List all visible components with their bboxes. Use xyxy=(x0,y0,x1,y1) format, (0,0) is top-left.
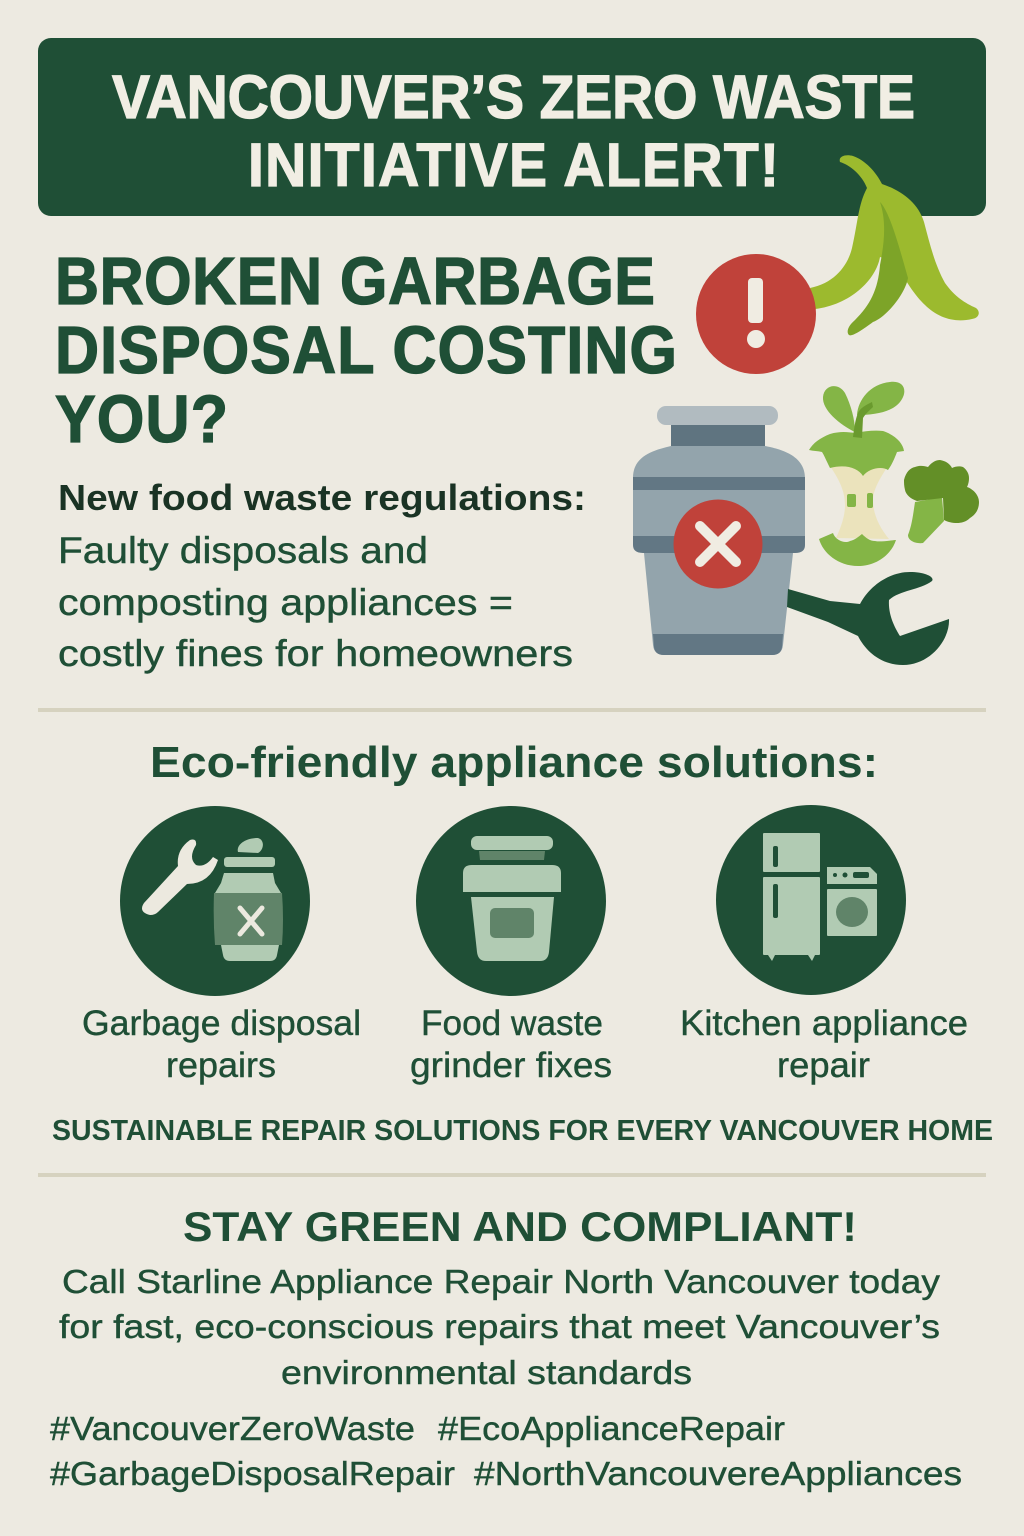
icon: red x badge xyxy=(674,500,762,588)
heading: broken garbage disposal: YOU? xyxy=(55,382,228,457)
heading: broken garbage disposal: DISPOSAL COSTING xyxy=(55,313,677,388)
text block: regulations detail: composting appliances = xyxy=(58,582,513,623)
title: INITIATIVE ALERT! xyxy=(248,130,779,199)
title xyxy=(112,62,915,199)
label: kitchen appliance repair: Kitchen appliance xyxy=(680,1004,968,1043)
tagline: SUSTAINABLE REPAIR SOLUTIONS FOR EVERY VANCOUVER HOME xyxy=(52,1115,993,1147)
label: garbage disposal repairs xyxy=(82,1004,361,1085)
heading: broken garbage disposal: BROKEN GARBAGE xyxy=(55,244,655,319)
icon: garbage disposal repairs xyxy=(120,806,310,996)
text block: regulations detail: costly fines for homeowners xyxy=(58,633,573,674)
text block: call to action xyxy=(59,1263,941,1391)
label: food waste grinder fixes xyxy=(410,1004,612,1085)
text block: regulations lead: New food waste regulations: xyxy=(58,477,586,518)
heading: stay green and compliant: STAY GREEN AND COMPLIANT! xyxy=(183,1203,857,1250)
text block: hashtags: #NorthVancouvereAppliances xyxy=(474,1455,962,1492)
icon: broccoli xyxy=(904,460,979,543)
label: garbage disposal repairs: Garbage disposal xyxy=(82,1004,361,1043)
panel: problem section xyxy=(55,244,677,674)
panel: call to action xyxy=(50,1203,962,1492)
icon: food waste grinder xyxy=(416,806,606,996)
text block: call to action: Call Starline Appliance Repair North Vancouver today xyxy=(62,1263,941,1300)
text block: regulations detail xyxy=(58,530,573,674)
icon: kitchen appliances xyxy=(716,805,906,995)
text block: call to action: for fast, eco-conscious repairs that meet Vancouver’s xyxy=(59,1308,940,1345)
text block: call to action: environmental standards xyxy=(281,1354,692,1391)
text block: regulations detail: Faulty disposals and xyxy=(58,530,428,571)
label: garbage disposal repairs: repairs xyxy=(166,1046,276,1085)
text block: hashtags: #EcoApplianceRepair xyxy=(438,1410,785,1447)
icon: broken garbage disposal xyxy=(633,406,805,655)
text block: hashtags: #VancouverZeroWaste xyxy=(50,1410,415,1447)
label: kitchen appliance repair xyxy=(680,1004,968,1085)
icon: red exclamation alert xyxy=(696,254,816,374)
panel: eco-friendly solutions xyxy=(52,738,993,1147)
text block: hashtags xyxy=(50,1410,962,1492)
icon: apple core xyxy=(809,382,904,566)
label: kitchen appliance repair: repair xyxy=(777,1046,870,1085)
heading: eco-friendly solutions: Eco-friendly appliance solutions: xyxy=(150,738,878,787)
icon: wrench xyxy=(787,572,949,665)
label: food waste grinder fixes: grinder fixes xyxy=(410,1046,612,1085)
panel: title banner xyxy=(38,38,986,216)
label: food waste grinder fixes: Food waste xyxy=(421,1004,603,1043)
text block: hashtags: #GarbageDisposalRepair xyxy=(50,1455,455,1492)
heading: broken garbage disposal xyxy=(55,244,677,457)
title: VANCOUVER’S ZERO WASTE xyxy=(112,62,915,131)
icon: banana peel xyxy=(810,155,979,335)
